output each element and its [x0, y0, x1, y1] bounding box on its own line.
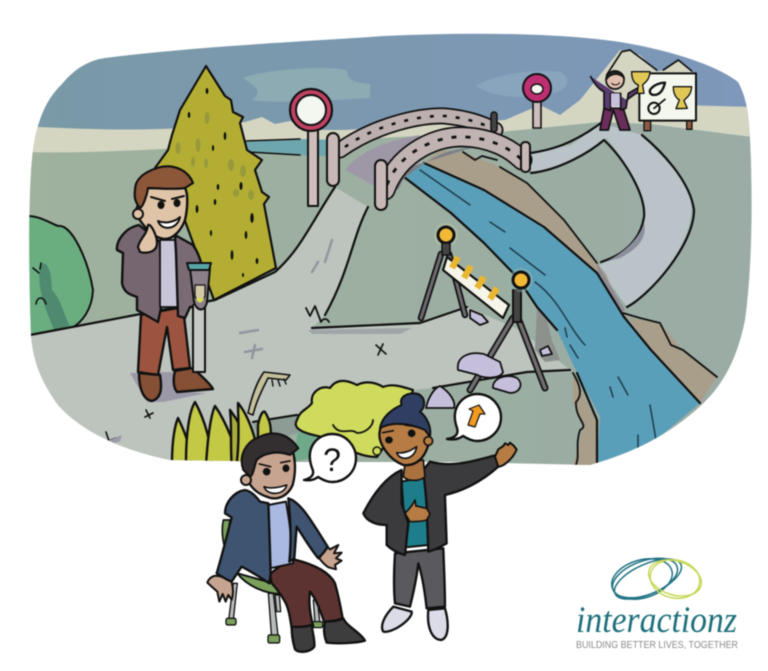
speech bubble: question: [304, 434, 356, 482]
cream horizon band: [32, 50, 750, 153]
hair: [242, 433, 298, 477]
finish: winner and trophy board: [587, 50, 696, 131]
logo wordmark: interactionz: [576, 600, 737, 641]
trousers: [138, 307, 190, 375]
road barrier: [421, 223, 545, 390]
foreground plant stalk: [248, 372, 290, 415]
character: man with crutch: [117, 166, 213, 402]
character: seated man: [207, 433, 365, 652]
rocks: [426, 310, 552, 408]
logo: interactionz: [576, 550, 738, 651]
hand to chin: [138, 225, 157, 253]
hand on chest: [405, 500, 430, 522]
winner figure: [591, 71, 650, 130]
chair: [222, 520, 323, 643]
speech bubble: question: ?: [323, 442, 341, 478]
head: [379, 413, 429, 465]
spiky plant: [172, 402, 271, 470]
panel: landscape scene: [0, 20, 768, 470]
hand left: [207, 576, 233, 602]
neck: [403, 460, 425, 480]
hair: [135, 166, 193, 208]
shoes: [292, 618, 365, 652]
logo mark rings: [607, 550, 706, 607]
hair: [380, 393, 430, 437]
jacket and hood: [117, 225, 162, 322]
jacket: [217, 490, 328, 583]
bush left: [28, 216, 93, 336]
conifer tree: [155, 66, 276, 300]
trophy board: [639, 73, 696, 131]
trousers: [394, 548, 445, 608]
trousers: [270, 559, 343, 628]
hand right: [319, 545, 342, 569]
shirt: [402, 477, 428, 547]
shadow: [130, 372, 207, 402]
face details: [151, 196, 184, 228]
brown river banks: [424, 150, 717, 465]
right road: [531, 123, 694, 307]
head: [135, 188, 187, 239]
character: woman gesturing: [363, 393, 517, 640]
shoes: [382, 607, 448, 640]
face: [383, 425, 417, 458]
sky: [31, 33, 752, 170]
clouds: [243, 68, 567, 102]
stone bridge: [327, 112, 530, 210]
river: [404, 163, 700, 470]
logo tagline: BUILDING BETTER LIVES, TOGETHER: [576, 639, 738, 651]
jacket: [363, 455, 498, 555]
green field: [20, 122, 752, 470]
head: [248, 448, 295, 498]
signpost far: [523, 74, 551, 128]
road and foreground: [20, 187, 570, 470]
boots: [139, 368, 213, 401]
signpost near: [290, 89, 332, 206]
yellow-green bush: [296, 381, 413, 457]
face: [259, 461, 290, 493]
speech bubble: arrow: [447, 394, 501, 441]
distant pond: [245, 138, 326, 156]
crutch: [187, 263, 211, 373]
raised hand: [495, 443, 517, 467]
shirt: [268, 502, 293, 568]
